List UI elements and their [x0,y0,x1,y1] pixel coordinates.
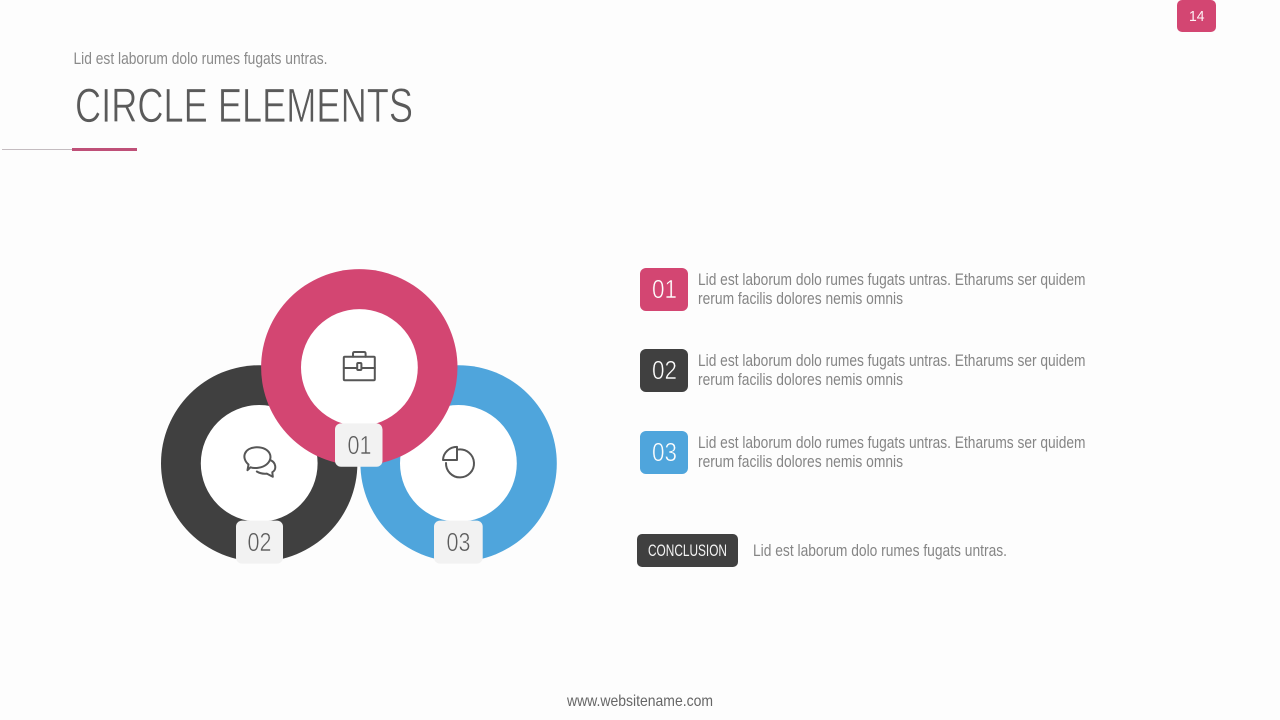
footer url: www.websitename.com [566,693,713,710]
list item 01: rerum facilis dolores nemis omnis [698,290,903,308]
badge 01 [335,423,382,467]
icon: briefcase [344,352,375,380]
subtitle: Lid est laborum dolo rumes fugats untras. [74,50,328,68]
list item 02 [640,349,1086,392]
circle diagram [161,269,557,564]
list item 01: Lid est laborum dolo rumes fugats untras. Etharums ser quidem [698,271,1086,289]
badge 03: 03 [446,527,470,557]
list item 03: rerum facilis dolores nemis omnis [698,453,903,471]
conclusion: CONCLUSION [648,541,727,560]
conclusion: Lid est laborum dolo rumes fugats untras. [753,542,1007,560]
ring 03: blue [360,365,557,562]
badge 02: 02 [248,527,272,557]
ring 02: dark [161,365,357,562]
title: CIRCLE ELEMENTS [75,80,413,133]
list item 02: rerum facilis dolores nemis omnis [698,371,903,389]
list item 03 [640,431,1086,474]
icon: pie chart [443,447,474,477]
list item 03: 03 [652,437,677,467]
badge 01: 01 [348,430,372,460]
page number tag [1177,0,1216,32]
badge 03 [434,521,483,564]
list item 01: 01 [652,274,677,304]
icon: speech bubbles [244,447,275,477]
list item 03: Lid est laborum dolo rumes fugats untras. Etharums ser quidem [698,434,1086,452]
list item 01 [640,268,1086,311]
list item 02: 02 [652,355,677,385]
page number tag: 14 [1189,8,1204,25]
title underline [2,148,137,151]
badge 02 [236,521,283,564]
conclusion [637,534,1007,567]
list item 02: Lid est laborum dolo rumes fugats untras. Etharums ser quidem [698,352,1086,370]
ring 01: pink [261,269,457,465]
